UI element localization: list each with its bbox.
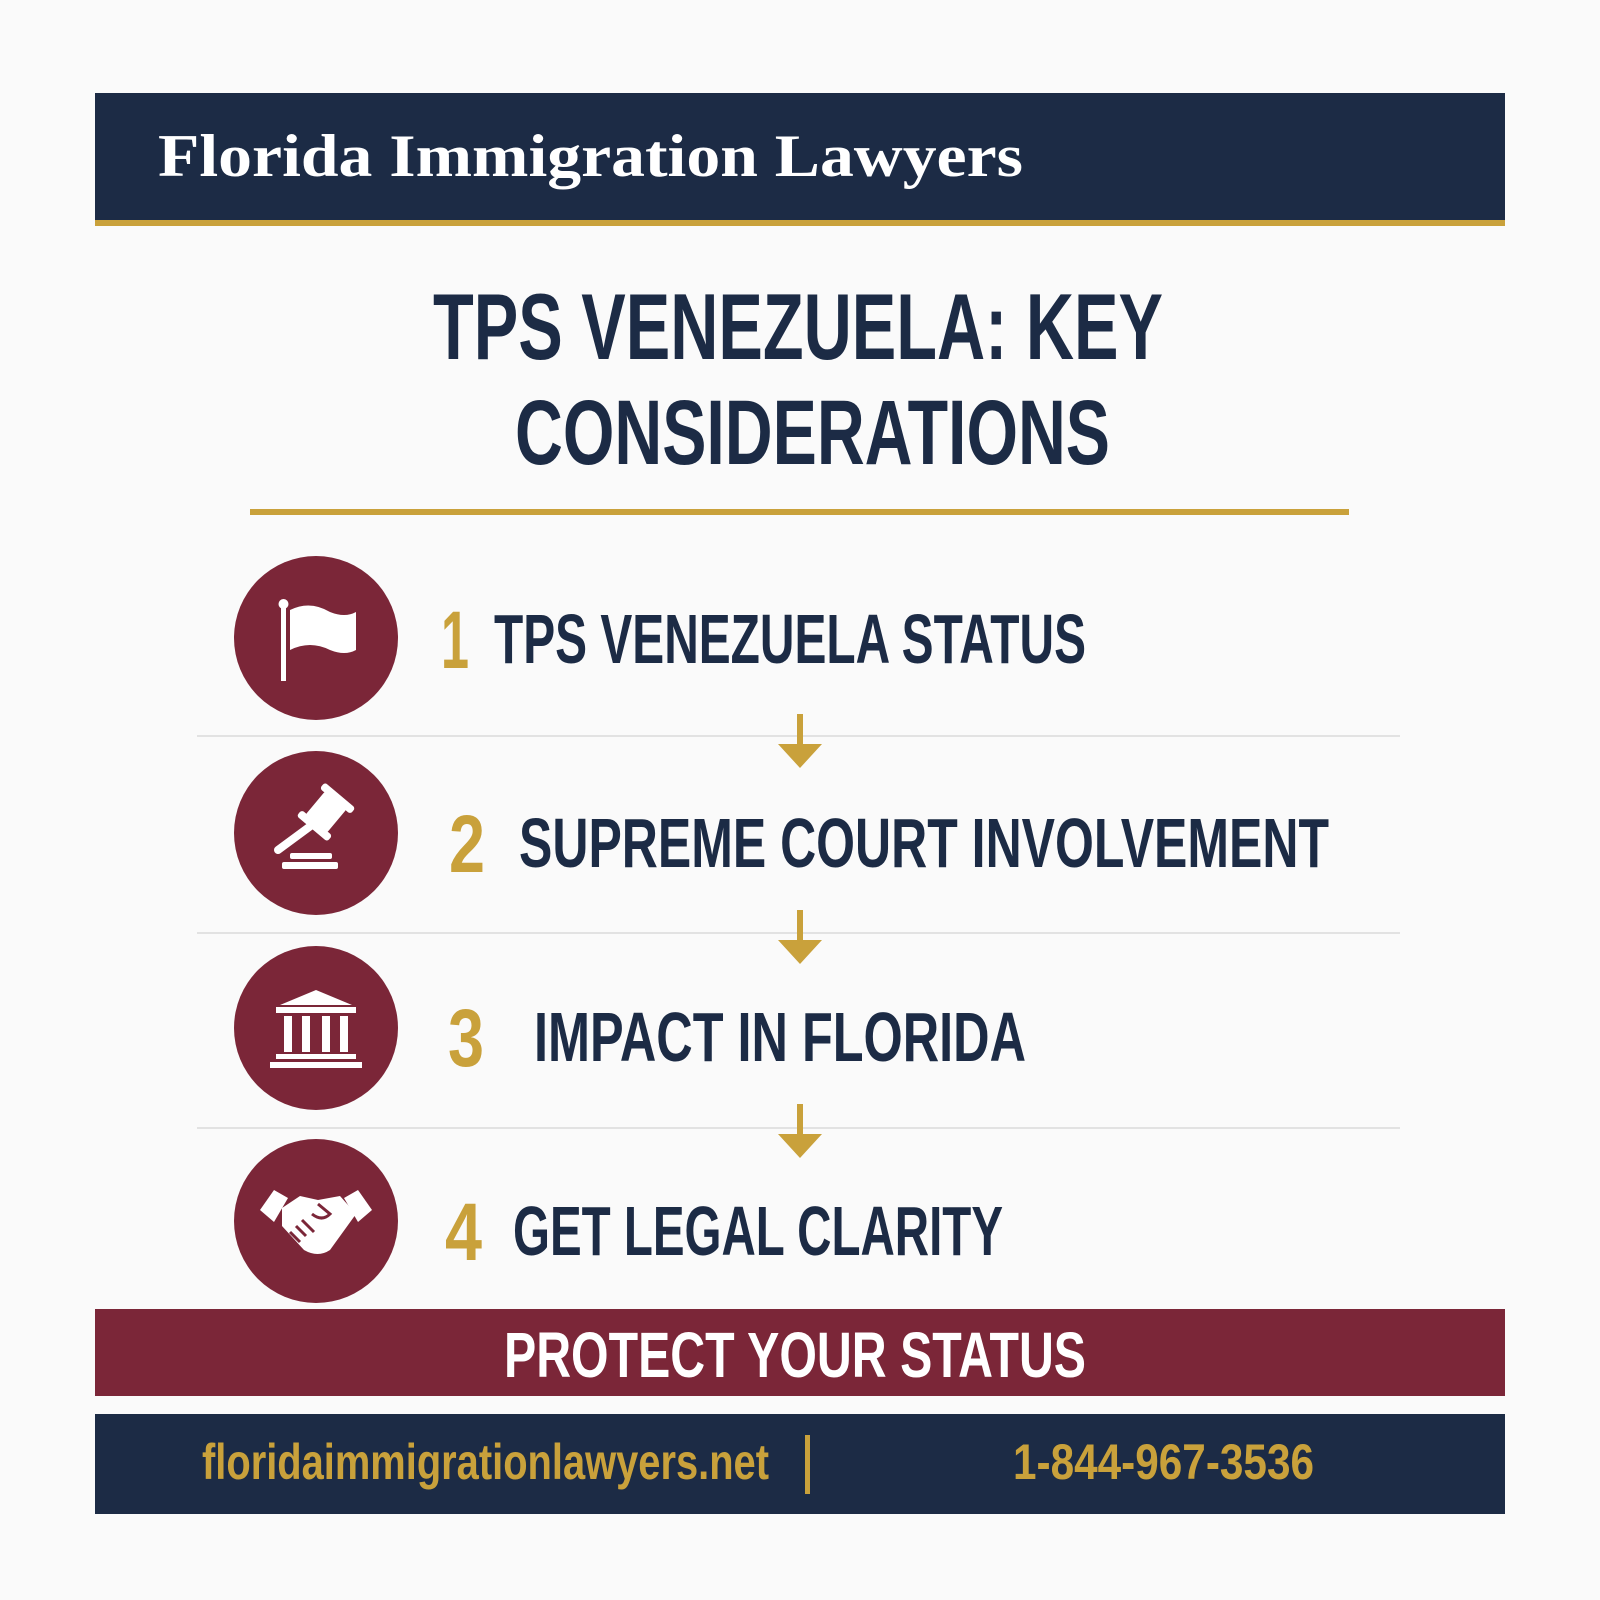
item 1: TPS VENEZUELA STATUS: [494, 600, 1086, 678]
item 4: 4: [445, 1187, 482, 1278]
item 1: [234, 556, 1086, 720]
arrow 1: [778, 714, 822, 768]
title: [433, 274, 1163, 484]
icon: courthouse: [234, 946, 398, 1110]
title: TPS VENEZUELA: KEY: [433, 274, 1163, 379]
footer: 1-844-967-3536: [1013, 1434, 1314, 1490]
item 2: [234, 751, 1329, 915]
item 2: 2: [449, 799, 485, 890]
item 3: 3: [448, 993, 484, 1084]
icon: handshake: [234, 1139, 398, 1303]
item 1: 1: [441, 595, 469, 686]
icon: gavel: [234, 751, 398, 915]
footer: [95, 1414, 1505, 1514]
banner: protect your status: PROTECT YOUR STATUS: [504, 1319, 1086, 1391]
title: CONSIDERATIONS: [515, 382, 1110, 484]
arrow 2: [778, 910, 822, 964]
header bar: [95, 93, 1505, 226]
icon: flag: [234, 556, 398, 720]
header bar: Florida Immigration Lawyers: [158, 123, 1023, 189]
item 4: [234, 1139, 1003, 1303]
footer: floridaimmigrationlawyers.net: [202, 1434, 769, 1490]
item 3: IMPACT IN FLORIDA: [534, 998, 1026, 1076]
item 4: GET LEGAL CLARITY: [513, 1192, 1003, 1270]
arrow 3: [778, 1104, 822, 1158]
banner: protect your status: [95, 1309, 1505, 1396]
item 3: [234, 946, 1026, 1110]
